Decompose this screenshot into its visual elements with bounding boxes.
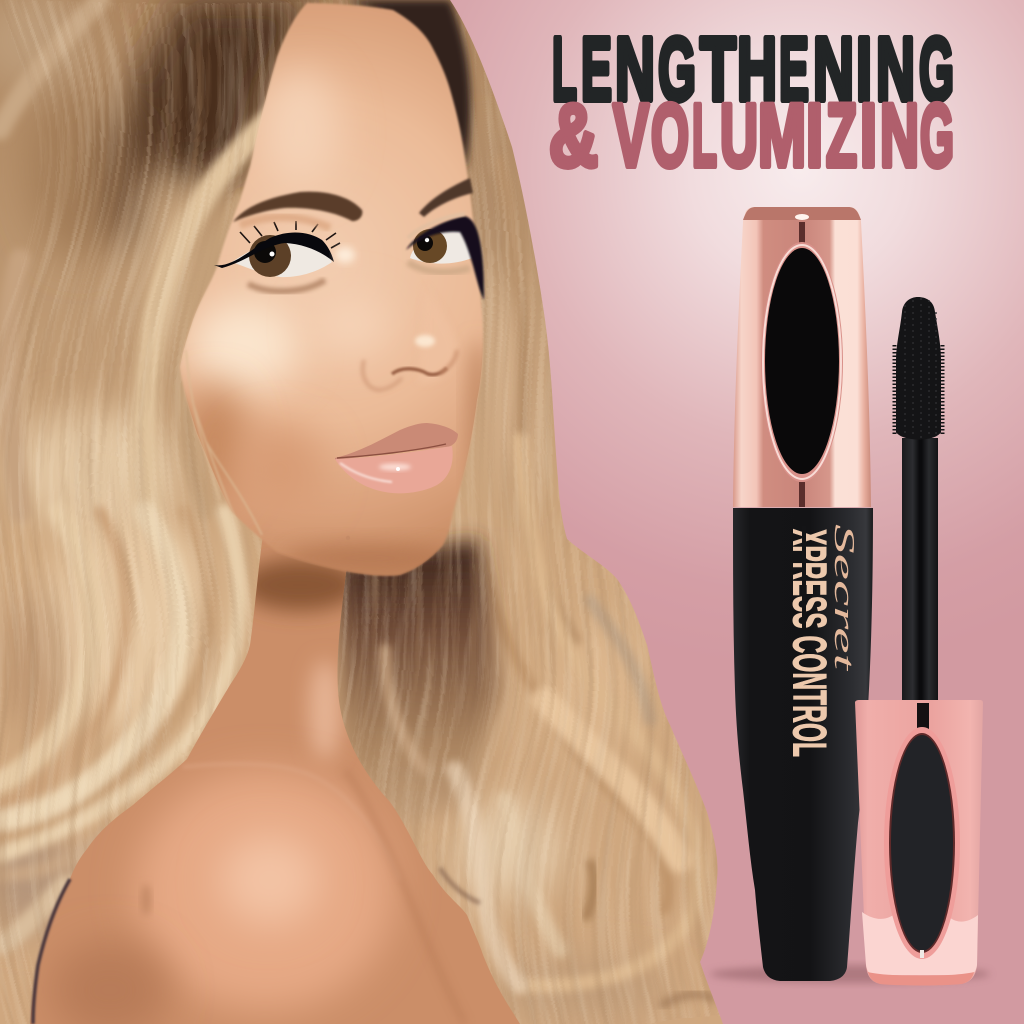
infographic canvas: G: [919, 20, 954, 120]
title line one: E: [779, 20, 809, 120]
cap top specular: [795, 214, 809, 220]
title line two: Z: [826, 85, 857, 185]
right eyebrow: [419, 178, 473, 217]
left eyebrow: [233, 192, 362, 222]
wand stem: [902, 438, 938, 703]
title line two: V: [613, 85, 649, 185]
title line two: &: [549, 85, 598, 185]
floor shadow: [710, 965, 990, 983]
title line one: E: [581, 20, 612, 120]
left eye: [214, 217, 340, 291]
title line two: N: [880, 85, 919, 185]
dark hair behind neck: [335, 540, 500, 830]
mascara tube: [733, 207, 873, 981]
title line two: M: [758, 85, 806, 185]
title line one: L: [552, 20, 577, 120]
cap rim: [743, 207, 861, 220]
brand script: Secret: [828, 524, 859, 673]
title line two: U: [720, 85, 758, 185]
tube cap: [733, 207, 871, 507]
hair: [0, 0, 730, 1024]
product name: XPRESS CONTROL: [784, 529, 836, 757]
mascara wand: [894, 297, 942, 703]
right eye: [406, 214, 484, 300]
title line two: I: [860, 85, 877, 185]
title line one: T: [700, 20, 736, 120]
title line one: G: [658, 20, 696, 120]
title line one: H: [737, 20, 777, 120]
infographic canvas: G: [920, 85, 954, 185]
nose: [335, 247, 457, 390]
title line two: L: [692, 85, 717, 185]
face: [180, 3, 488, 576]
label cut stripe: [802, 526, 806, 628]
tube body: [733, 508, 873, 981]
title line one: I: [856, 20, 872, 120]
title line one: N: [615, 20, 655, 120]
wand cap notch: [917, 703, 929, 729]
wand cap: [855, 700, 983, 986]
cap lower reflection: [862, 905, 978, 975]
brush texture: [905, 298, 936, 440]
wand brush: [896, 297, 941, 440]
hair strands over cheek: [186, 350, 262, 535]
beauty mark: [346, 536, 350, 540]
wand cap window: [884, 727, 960, 959]
title: [549, 20, 954, 185]
title line two: O: [651, 85, 689, 185]
brush bristles: [894, 345, 942, 436]
hair roots right of parting: [345, 0, 471, 170]
lips: [335, 423, 458, 493]
title line two: I: [806, 85, 823, 185]
title line one: N: [813, 20, 854, 120]
neck and bare shoulder: [30, 535, 520, 1024]
title line one: N: [876, 20, 915, 120]
cap bottom rim: [868, 972, 974, 986]
cap window: [761, 222, 843, 507]
